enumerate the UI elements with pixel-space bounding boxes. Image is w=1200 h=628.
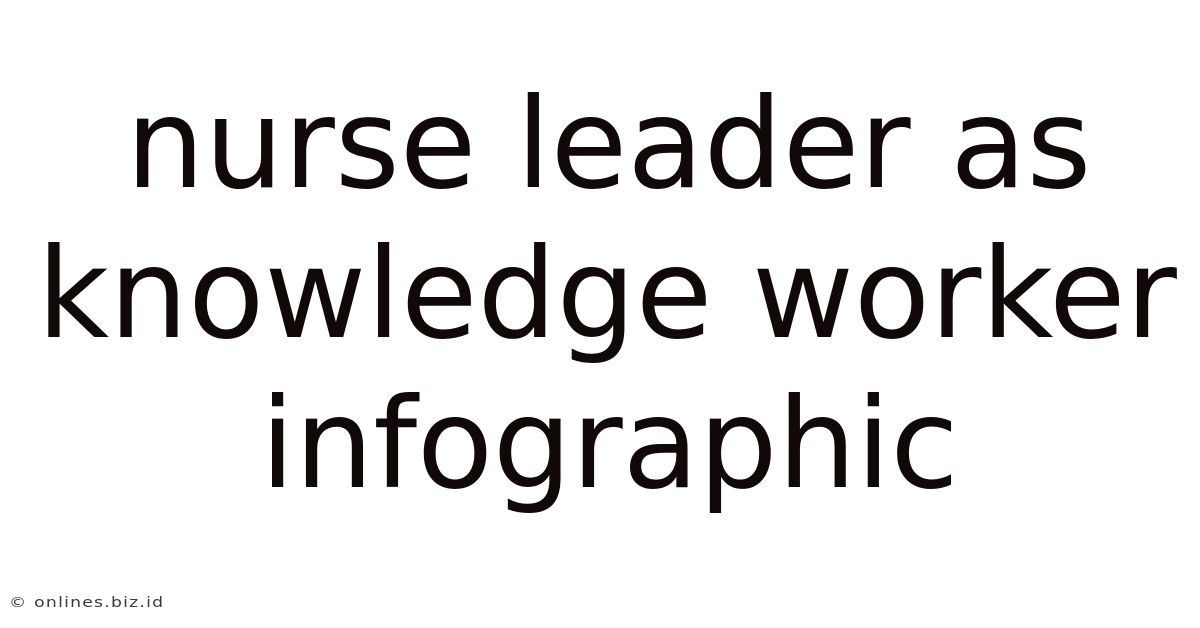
title: nurse leader as	[126, 72, 1091, 217]
title	[37, 72, 1177, 517]
title: knowledge worker	[37, 222, 1177, 367]
title: infographic	[260, 372, 959, 517]
watermark: © onlines.biz.id	[9, 595, 164, 611]
